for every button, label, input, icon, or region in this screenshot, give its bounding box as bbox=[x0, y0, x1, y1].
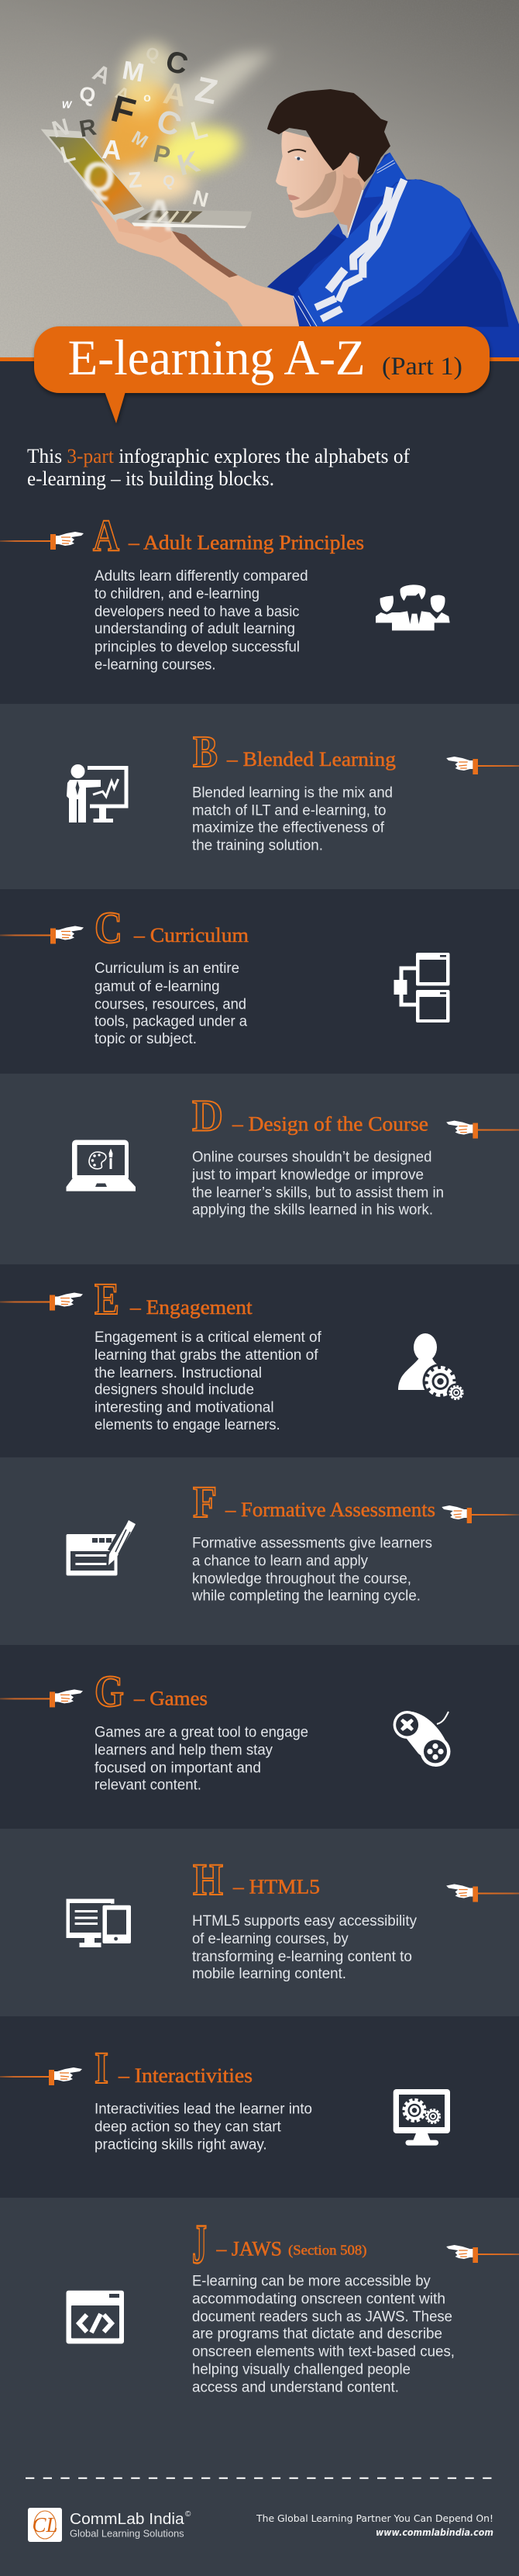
heading: – HTML5 bbox=[232, 1876, 320, 1898]
body text bbox=[192, 1913, 417, 1982]
panel: C – Curriculum bbox=[0, 889, 519, 1074]
heading: – JAWS bbox=[216, 2237, 282, 2260]
illustration: man in blue jacket bbox=[267, 89, 519, 360]
body text bbox=[191, 1536, 432, 1605]
body text: Curriculum is an entire bbox=[95, 960, 239, 977]
icon: linked windows bbox=[394, 953, 449, 1022]
body text: Blended learning is the mix and bbox=[192, 785, 393, 802]
body text bbox=[191, 1149, 444, 1218]
letter A: A bbox=[93, 510, 119, 560]
letter B: B bbox=[193, 726, 218, 777]
body text: transforming e-learning content to bbox=[192, 1949, 412, 1965]
body text: tools, packaged under a bbox=[95, 1014, 247, 1029]
panel: D – Design of the Course bbox=[0, 1074, 519, 1264]
body text: mobile learning content. bbox=[192, 1966, 346, 1982]
icon: presenter with chart bbox=[67, 764, 126, 822]
illustration: flying alphabet letters: L bbox=[188, 115, 211, 147]
heading: – Interactivities bbox=[118, 2064, 253, 2087]
body text: are programs that dictate and describe bbox=[192, 2326, 442, 2342]
footer: company name: CommLab India bbox=[70, 2511, 185, 2528]
body text bbox=[95, 1329, 321, 1433]
body text: the training solution. bbox=[192, 837, 323, 854]
body text: while completing the learning cycle. bbox=[191, 1588, 421, 1605]
pointing hand bbox=[446, 1121, 519, 1139]
footer divider bbox=[26, 2478, 494, 2479]
illustration: flying alphabet letters: A bbox=[161, 76, 189, 113]
illustration: flying alphabet letters: A bbox=[112, 82, 133, 105]
panel: header photo bbox=[0, 0, 519, 360]
footer: tagline: The Global Learning Partner You Can Depend On! bbox=[256, 2512, 493, 2524]
pointing hand bbox=[446, 757, 519, 774]
heading: – Engagement bbox=[129, 1296, 253, 1319]
body text: applying the skills learned in his work. bbox=[192, 1202, 433, 1218]
icon: desktop and tablet bbox=[67, 1899, 132, 1947]
body text: knowledge throughout the course, bbox=[192, 1571, 411, 1588]
letter I: I bbox=[95, 2043, 108, 2093]
panel: H – HTML5 bbox=[0, 1829, 519, 2016]
panel: B – Blended Learning bbox=[0, 704, 519, 889]
heading: – Blended Learning bbox=[226, 748, 396, 771]
body text: practicing skills right away. bbox=[95, 2136, 267, 2153]
body text bbox=[95, 568, 308, 673]
illustration: flying alphabet letters: L bbox=[57, 140, 78, 168]
illustration: flying alphabet letters: Z bbox=[192, 69, 221, 112]
body text bbox=[95, 960, 247, 1047]
body text: topic or subject. bbox=[95, 1031, 197, 1047]
body text: Formative assessments give learners bbox=[192, 1536, 432, 1552]
icon: group of adults bbox=[376, 585, 450, 630]
panel: G – Games bbox=[0, 1645, 519, 1829]
pointing hand bbox=[0, 926, 84, 944]
body text: to children, and e-learning bbox=[95, 586, 260, 602]
pointing hand bbox=[0, 1689, 83, 1707]
illustration: flying alphabet letters: M bbox=[129, 127, 152, 152]
pointing hand bbox=[442, 1505, 519, 1523]
icon: form with pencil bbox=[67, 1520, 136, 1575]
body text bbox=[192, 2274, 455, 2396]
body text bbox=[192, 785, 393, 854]
body text: Adults learn differently compared bbox=[95, 568, 308, 585]
body text: Games are a great tool to engage bbox=[95, 1724, 308, 1741]
illustration: open laptop bbox=[41, 129, 252, 243]
body text: e-learning courses. bbox=[95, 657, 215, 673]
letter D: D bbox=[192, 1090, 223, 1141]
icon: person with gears bbox=[398, 1333, 466, 1402]
pointing hand bbox=[0, 1293, 83, 1310]
pointing hand bbox=[446, 1884, 519, 1902]
body text: Interactivities lead the learner into bbox=[95, 2101, 312, 2118]
letter J: J bbox=[192, 2213, 207, 2276]
footer: logo: CL bbox=[32, 2513, 58, 2536]
illustration: flying alphabet letters: C bbox=[162, 44, 191, 82]
illustration: forearm and hand bbox=[91, 200, 307, 329]
icon: laptop with palette bbox=[67, 1140, 136, 1191]
illustration: flying alphabet letters: Q bbox=[144, 43, 161, 65]
letter F: F bbox=[193, 1477, 217, 1527]
heading: – Curriculum bbox=[133, 924, 249, 947]
footer: tagline: www.commlabindia.com bbox=[376, 2526, 493, 2538]
body text bbox=[95, 2101, 312, 2153]
panel: J – JAWS and footer bbox=[0, 2198, 519, 2576]
illustration: flying alphabet letters: M bbox=[120, 56, 146, 88]
illustration: flying alphabet letters: o bbox=[143, 91, 151, 105]
body text: accommodating onscreen content with bbox=[192, 2292, 445, 2307]
body text: understanding of adult learning bbox=[95, 621, 295, 637]
illustration: flying alphabet letters: A bbox=[101, 134, 123, 166]
footer: company name: © bbox=[185, 2510, 191, 2519]
letter E: E bbox=[95, 1274, 119, 1324]
letter H: H bbox=[193, 1854, 223, 1905]
body text: learning that grabs the attention of bbox=[95, 1347, 318, 1364]
intro text bbox=[27, 445, 410, 490]
body text: principles to develop successful bbox=[95, 639, 300, 656]
illustration: flying alphabet letters bbox=[52, 48, 218, 233]
panel: A – Adult Learning Principles bbox=[0, 358, 519, 704]
body text: deep action so they can start bbox=[95, 2119, 281, 2135]
illustration: flying alphabet letters: P bbox=[151, 139, 173, 170]
illustration: flying alphabet letters: W bbox=[62, 98, 73, 110]
body text: HTML5 supports easy accessibility bbox=[192, 1913, 417, 1929]
heading: – Design of the Course bbox=[232, 1113, 428, 1135]
intro text: e-learning – its building blocks. bbox=[27, 467, 274, 490]
icon: game controller bbox=[394, 1711, 451, 1767]
icon: monitor with gears bbox=[394, 2089, 450, 2146]
illustration: flying alphabet letters: N bbox=[191, 185, 211, 212]
illustration: flying alphabet letters: R bbox=[77, 114, 98, 143]
illustration: flying alphabet letters: C bbox=[152, 102, 186, 143]
heading note: (Section 508) bbox=[288, 2242, 367, 2259]
body text: Engagement is a critical element of bbox=[95, 1329, 321, 1346]
body text: interesting and motivational bbox=[95, 1400, 274, 1416]
illustration: flying alphabet letters: Q bbox=[161, 172, 176, 191]
body text: document readers such as JAWS. These bbox=[192, 2309, 452, 2325]
body text: designers should include bbox=[95, 1381, 254, 1398]
footer: logo bbox=[28, 2508, 62, 2542]
body text: the learner’s skills, but to assist them in bbox=[192, 1185, 444, 1201]
illustration: flying alphabet letters: A bbox=[141, 190, 177, 241]
illustration: flying alphabet letters: Q bbox=[79, 150, 119, 203]
body text: elements to engage learners. bbox=[95, 1417, 280, 1433]
body text: E-learning can be more accessible by bbox=[192, 2274, 431, 2290]
body text: courses, resources, and bbox=[95, 997, 246, 1012]
illustration: flying alphabet letters: Z bbox=[127, 167, 143, 193]
illustration: flying alphabet letters: N bbox=[49, 114, 72, 143]
title banner bbox=[34, 326, 490, 423]
body text: the learners. Instructional bbox=[95, 1365, 262, 1381]
pointing hand bbox=[0, 532, 84, 550]
panel: F – Formative Assessments bbox=[0, 1457, 519, 1645]
pointing hand bbox=[446, 2245, 519, 2263]
footer: tagline bbox=[256, 2512, 493, 2538]
body text: a chance to learn and apply bbox=[192, 1554, 368, 1570]
footer: company name: Global Learning Solutions bbox=[70, 2529, 184, 2540]
body text: onscreen elements with text-based cues, bbox=[192, 2343, 455, 2360]
body text: just to impart knowledge or improve bbox=[191, 1167, 424, 1183]
pointing hand bbox=[0, 2067, 82, 2085]
panel: E – Engagement bbox=[0, 1264, 519, 1457]
body text: learners and help them stay bbox=[95, 1743, 273, 1758]
footer: company name bbox=[70, 2510, 191, 2540]
part label: (Part 1) bbox=[382, 353, 462, 381]
body text: maximize the effectiveness of bbox=[192, 820, 385, 836]
heading: – Formative Assessments bbox=[225, 1498, 435, 1521]
body text: Online courses shouldn’t be designed bbox=[192, 1149, 431, 1166]
body text: match of ILT and e-learning, to bbox=[192, 802, 386, 819]
heading: – Games bbox=[133, 1688, 208, 1710]
light glow from laptop bbox=[86, 33, 273, 202]
icon: code window bbox=[67, 2291, 124, 2343]
body text: helping visually challenged people bbox=[192, 2362, 411, 2378]
body text: relevant content. bbox=[95, 1777, 201, 1794]
body text: of e-learning courses, by bbox=[192, 1931, 349, 1947]
orange header strip bbox=[0, 357, 519, 361]
illustration: flying alphabet letters: F bbox=[107, 88, 139, 134]
intro text: This 3-part infographic explores the alphabets of bbox=[27, 445, 410, 467]
letter G: G bbox=[95, 1666, 124, 1716]
body text: gamut of e-learning bbox=[95, 978, 220, 995]
letter C: C bbox=[95, 902, 122, 953]
panel: I – Interactivities bbox=[0, 2016, 519, 2198]
illustration: flying alphabet letters: K bbox=[174, 145, 204, 183]
body text: focused on important and bbox=[95, 1760, 261, 1776]
body text: developers need to have a basic bbox=[95, 604, 299, 620]
body text: access and understand content. bbox=[192, 2380, 399, 2396]
body text bbox=[95, 1724, 308, 1794]
illustration: flying alphabet letters: Q bbox=[78, 82, 97, 107]
illustration: flying alphabet letters: A bbox=[89, 60, 115, 90]
heading: – Adult Learning Principles bbox=[128, 532, 364, 553]
title text: E-learning A-Z bbox=[68, 330, 366, 386]
